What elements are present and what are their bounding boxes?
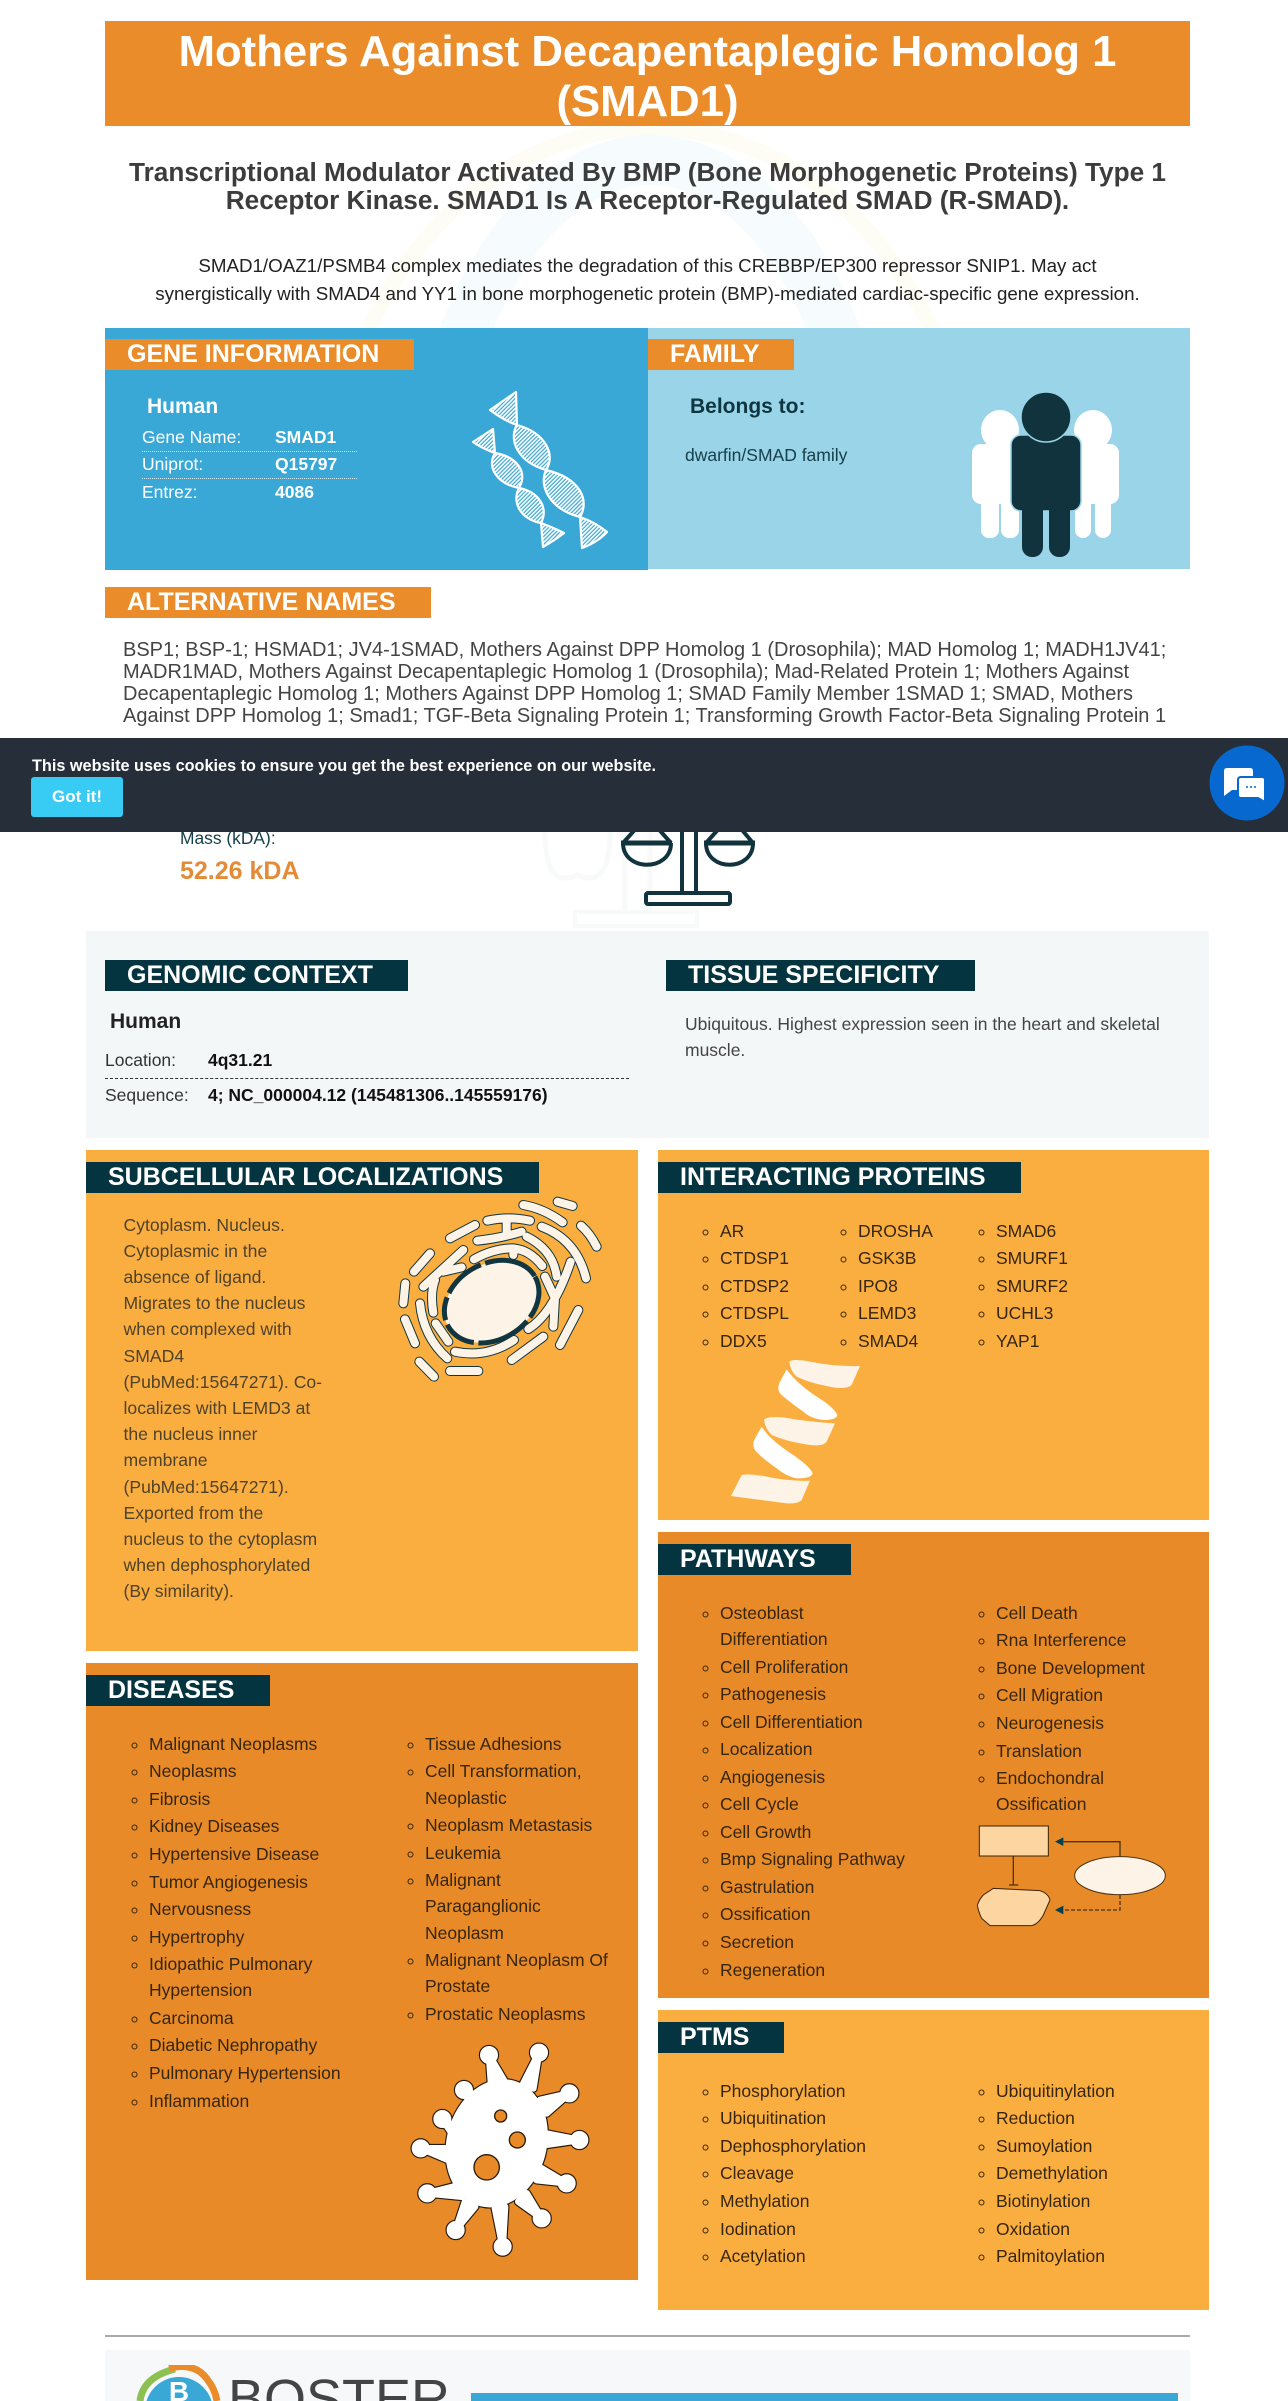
list: proteins column 1: AR: [720, 1221, 744, 1241]
gene details table: Gene Name:: [142, 427, 241, 447]
list: proteins column 2: DROSHA: [858, 1221, 933, 1241]
tissue specificity text: [685, 1014, 1160, 1060]
localization text: localizes with LEMD3 at: [124, 1398, 310, 1418]
list: diseases column 1: Hypertensive Disease: [149, 1844, 319, 1864]
icon: cell organelle: [398, 1196, 602, 1382]
list: PTMs column 1: Phosphorylation: [720, 2081, 846, 2101]
heading: family: FAMILY: [670, 340, 759, 368]
list: proteins column 1: [702, 1221, 789, 1351]
localization text: Cytoplasmic in the: [124, 1241, 267, 1261]
list: diseases column 1: Fibrosis: [149, 1789, 210, 1809]
list: pathways column 1: [702, 1603, 905, 1980]
panel: genomic context and tissue specificity: [86, 931, 1209, 1138]
heading: diseases: [86, 1675, 270, 1706]
heading: subcellular localizations: SUBCELLULAR LOCALIZATIONS: [108, 1163, 503, 1191]
localization text: when dephosphorylated: [124, 1555, 310, 1575]
list: PTMs column 1: Acetylation: [720, 2246, 806, 2266]
list: pathways column 2: Endochondral: [996, 1768, 1104, 1788]
list: PTMs column 1: Methylation: [720, 2191, 810, 2211]
list: proteins column 2: GSK3B: [858, 1248, 916, 1268]
heading: tissue specificity: TISSUE SPECIFICITY: [688, 961, 939, 989]
list: pathways column 2: Bone Development: [996, 1658, 1145, 1678]
localization text: Exported from the: [124, 1503, 263, 1523]
list: diseases column 2: Prostatic Neoplasms: [425, 2004, 585, 2024]
localization text: Migrates to the nucleus: [124, 1293, 305, 1313]
heading: alternative names: ALTERNATIVE NAMES: [127, 588, 396, 616]
list: proteins column 2: LEMD3: [858, 1303, 916, 1323]
localization text: when complexed with: [124, 1319, 292, 1339]
mass value: 52.26 kDA: [180, 857, 300, 885]
localization text: absence of ligand.: [124, 1267, 266, 1287]
list: proteins column 2: SMAD4: [858, 1331, 918, 1351]
list: pathways column 2: Rna Interference: [996, 1630, 1126, 1650]
list: diseases column 1: Neoplasms: [149, 1761, 237, 1781]
subtitle: [129, 157, 1166, 215]
list: PTMs column 1: Iodination: [720, 2219, 796, 2239]
list: PTMs column 2: Reduction: [996, 2108, 1075, 2128]
list: diseases column 1: Hypertension: [149, 1980, 252, 2000]
list: diseases column 1: Diabetic Nephropathy: [149, 2035, 317, 2055]
list: proteins column 3: SMAD6: [996, 1221, 1056, 1241]
list: diseases column 2: Neoplasm: [425, 1923, 504, 1943]
panel: diseases: [86, 1663, 638, 2280]
alternative names text: [123, 639, 1166, 727]
list: pathways column 1: Localization: [720, 1739, 812, 1759]
list: pathways column 1: Cell Cycle: [720, 1794, 799, 1814]
gene details table: Uniprot:: [142, 454, 203, 474]
list: pathways column 2: Translation: [996, 1741, 1082, 1761]
list: PTMs column 2: [978, 2081, 1115, 2266]
genomic location row: Location:: [105, 1050, 176, 1070]
family name: dwarfin/SMAD family: [685, 445, 847, 465]
list: pathways column 2: Neurogenesis: [996, 1713, 1104, 1733]
list: diseases column 1: Carcinoma: [149, 2008, 234, 2028]
heading: interacting proteins: INTERACTING PROTEINS: [680, 1163, 986, 1191]
description: synergistically with SMAD4 and YY1 in bone morphogenetic protein (BMP)-mediated cardiac-specific gene expression.: [155, 283, 1140, 304]
list: pathways column 1: Pathogenesis: [720, 1684, 826, 1704]
genomic sequence row: Sequence:: [105, 1085, 189, 1105]
title: (SMAD1): [556, 77, 739, 126]
list: proteins column 1: CTDSPL: [720, 1303, 789, 1323]
localization text: (PubMed:15647271). Co-: [124, 1372, 322, 1392]
alternative names text: MADR1MAD, Mothers Against Decapentaplegic Homolog 1 (Drosophila); Mad-Related Protein 1; Mothers Against: [123, 661, 1129, 683]
localization text: the nucleus inner: [124, 1424, 258, 1444]
icon: pathway diagram: [976, 1826, 1166, 1926]
list: pathways column 1: Gastrulation: [720, 1877, 814, 1897]
list: diseases column 1: Kidney Diseases: [149, 1816, 279, 1836]
list: PTMs column 1: Dephosphorylation: [720, 2136, 866, 2156]
list: diseases column 2: [408, 1734, 608, 2024]
localization text: SMAD4: [124, 1346, 184, 1366]
list: diseases column 2: Malignant: [425, 1870, 501, 1890]
list: pathways column 1: Ossification: [720, 1904, 810, 1924]
localization text: (By similarity).: [124, 1581, 234, 1601]
subtitle: Transcriptional Modulator Activated By BMP (Bone Morphogenetic Proteins) Type 1: [129, 157, 1166, 187]
icon: people group: [972, 392, 1119, 557]
list: diseases column 2: Prostate: [425, 1976, 490, 1996]
localization text: membrane: [124, 1450, 208, 1470]
alternative names text: Against DPP Homolog 1; Smad1; TGF-Beta Signaling Protein 1; Transforming Growth Factor-Beta Signaling Protein 1: [123, 705, 1166, 727]
localization text: Cytoplasm. Nucleus.: [124, 1214, 285, 1234]
list: diseases column 1: Tumor Angiogenesis: [149, 1872, 308, 1892]
list: PTMs column 2: Palmitoylation: [996, 2246, 1105, 2266]
description: [155, 255, 1140, 304]
alternative names text: Decapentaplegic Homolog 1; Mothers Against DPP Homolog 1; SMAD Family Member 1SMAD 1; SMAD, Mothers: [123, 683, 1133, 705]
heading: gene information: GENE INFORMATION: [127, 340, 379, 368]
list: PTMs column 1: [702, 2081, 866, 2266]
cookie message: This website uses cookies to ensure you get the best experience on our website.: [32, 756, 656, 774]
list: pathways column 1: Angiogenesis: [720, 1767, 825, 1787]
localization text: nucleus to the cytoplasm: [124, 1529, 317, 1549]
list: PTMs column 1: Ubiquitination: [720, 2108, 826, 2128]
gene details table: SMAD1: [275, 427, 336, 447]
list: diseases column 1: Pulmonary Hypertension: [149, 2063, 341, 2083]
list: PTMs column 2: Biotinylation: [996, 2191, 1090, 2211]
heading: pathways: PATHWAYS: [680, 1545, 816, 1573]
icon: balance scale: [621, 832, 755, 906]
cookie button: Got it!: [52, 787, 102, 806]
icon: DNA helix: [472, 390, 608, 550]
list: pathways column 1: Secretion: [720, 1932, 794, 1952]
gene details table: Q15797: [275, 454, 337, 474]
gene details table: 4086: [275, 482, 314, 502]
heading: genomic context: GENOMIC CONTEXT: [127, 961, 373, 989]
list: PTMs column 2: Ubiquitinylation: [996, 2081, 1115, 2101]
list: pathways column 1: Osteoblast: [720, 1603, 804, 1623]
species label: Human: [147, 395, 218, 418]
gene details table: Entrez:: [142, 482, 197, 502]
list: pathways column 2: Ossification: [996, 1794, 1086, 1814]
list: diseases column 2: Neoplasm Metastasis: [425, 1815, 592, 1835]
list: diseases column 2: Leukemia: [425, 1843, 501, 1863]
icon: chat bubble button: [1210, 746, 1284, 820]
list: diseases column 1: Idiopathic Pulmonary: [149, 1954, 312, 1974]
list: PTMs column 1: Cleavage: [720, 2163, 794, 2183]
list: diseases column 2: Paraganglionic: [425, 1896, 541, 1916]
list: pathways column 1: Differentiation: [720, 1629, 828, 1649]
panel: subcellular localizations: [86, 1150, 638, 1651]
panel: family: [648, 328, 1190, 569]
belongs to label: Belongs to:: [690, 395, 806, 418]
list: proteins column 1: DDX5: [720, 1331, 767, 1351]
list: pathways column 1: Cell Growth: [720, 1822, 811, 1842]
footer blue banner: [471, 2393, 1178, 2401]
cookie button: [31, 777, 123, 817]
panel: PTMs: [658, 2010, 1209, 2310]
list: proteins column 3: YAP1: [996, 1331, 1039, 1351]
heading: family: [648, 339, 794, 370]
panel: interacting proteins: [658, 1150, 1209, 1520]
genomic location row: 4q31.21: [208, 1050, 272, 1070]
list: diseases column 1: [132, 1734, 341, 2111]
list: proteins column 3: SMURF2: [996, 1276, 1068, 1296]
cookie banner: [0, 738, 1288, 832]
alternative names text: BSP1; BSP-1; HSMAD1; JV4-1SMAD, Mothers Against DPP Homolog 1 (Drosophila); MAD Homolog 1; MADH1JV41;: [123, 639, 1166, 661]
genomic sequence row: 4; NC_000004.12 (145481306..145559176): [208, 1085, 548, 1105]
subtitle: Receptor Kinase. SMAD1 Is A Receptor-Regulated SMAD (R-SMAD).: [226, 185, 1069, 215]
panel: footer: [105, 2350, 1190, 2401]
list: proteins column 2: IPO8: [858, 1276, 898, 1296]
mass label: Mass (kDA):: [180, 828, 276, 848]
tissue specificity text: muscle.: [685, 1040, 745, 1060]
heading: pathways: [658, 1544, 851, 1575]
list: proteins column 3: UCHL3: [996, 1303, 1053, 1323]
panel: pathways: [658, 1532, 1209, 1998]
title: [105, 21, 1190, 126]
genomic location row: [105, 1050, 272, 1070]
list: diseases column 2: Malignant Neoplasm Of: [425, 1950, 608, 1970]
localization text: (PubMed:15647271).: [124, 1477, 289, 1497]
title: Mothers Against Decapentaplegic Homolog 1: [179, 27, 1116, 76]
list: proteins column 1: CTDSP2: [720, 1276, 789, 1296]
list: pathways column 2: [978, 1603, 1145, 1814]
list: PTMs column 2: Sumoylation: [996, 2136, 1092, 2156]
list: diseases column 1: Nervousness: [149, 1899, 251, 1919]
list: pathways column 1: Bmp Signaling Pathway: [720, 1849, 905, 1869]
description: SMAD1/OAZ1/PSMB4 complex mediates the degradation of this CREBBP/EP300 repressor SNIP1. May act: [198, 255, 1097, 276]
list: proteins column 2: [840, 1221, 933, 1351]
background watermark logo: [360, 126, 940, 328]
icon: Boster logo: [136, 2365, 220, 2401]
list: pathways column 1: Cell Proliferation: [720, 1657, 848, 1677]
list: diseases column 2: Tissue Adhesions: [425, 1734, 562, 1754]
list: PTMs column 2: Demethylation: [996, 2163, 1108, 2183]
list: proteins column 3: [978, 1221, 1068, 1351]
icon: virus: [410, 2042, 590, 2257]
list: pathways column 1: Regeneration: [720, 1960, 825, 1980]
tissue specificity text: Ubiquitous. Highest expression seen in the heart and skeletal: [685, 1014, 1160, 1034]
list: diseases column 2: Neoplastic: [425, 1788, 507, 1808]
list: proteins column 1: CTDSP1: [720, 1248, 789, 1268]
localization text: [124, 1214, 322, 1601]
gene details table: [142, 427, 357, 502]
list: diseases column 1: Inflammation: [149, 2091, 249, 2111]
heading: PTMs: [658, 2022, 784, 2053]
list: diseases column 1: Hypertrophy: [149, 1927, 244, 1947]
species label: Human: [110, 1010, 181, 1033]
heading: PTMs: PTMS: [680, 2023, 749, 2051]
list: pathways column 2: Cell Death: [996, 1603, 1078, 1623]
list: pathways column 1: Cell Differentiation: [720, 1712, 863, 1732]
list: proteins column 3: SMURF1: [996, 1248, 1068, 1268]
list: diseases column 2: Cell Transformation,: [425, 1761, 582, 1781]
list: PTMs column 2: Oxidation: [996, 2219, 1070, 2239]
list: diseases column 1: Malignant Neoplasms: [149, 1734, 317, 1754]
list: pathways column 2: Cell Migration: [996, 1685, 1103, 1705]
icon: protein ribbon helix: [731, 1360, 860, 1504]
panel: gene information: [105, 328, 648, 570]
heading: diseases: DISEASES: [108, 1676, 234, 1704]
